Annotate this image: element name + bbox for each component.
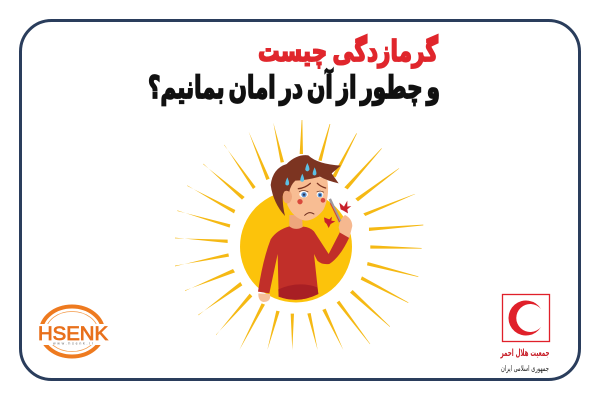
pain spikes	[324, 201, 351, 228]
logo url: www.hsenk.ir	[53, 342, 94, 346]
boy right hand	[339, 215, 352, 238]
boy sweater	[258, 226, 349, 300]
logo band	[36, 324, 109, 345]
sun rays	[175, 120, 423, 350]
logo ring	[41, 306, 103, 356]
boy mouth	[305, 213, 314, 215]
illustration: sick boy	[258, 155, 352, 302]
thermometer	[329, 198, 341, 223]
country name: جمهوری اسلامی ایران	[501, 364, 549, 373]
boy hair	[271, 155, 341, 216]
sweat drops	[285, 163, 316, 185]
logo: Red Crescent	[500, 294, 550, 373]
boy left hand	[258, 293, 270, 302]
crescent box	[502, 294, 550, 342]
logo: HSENK	[36, 306, 109, 356]
heading: how to stay safe: و چطور از آن در امان بمانیم؟	[148, 68, 440, 106]
boy head	[287, 175, 328, 221]
boy ear	[283, 190, 292, 203]
boy neck	[289, 215, 303, 230]
boy eyes	[298, 183, 326, 198]
title: what is heatstroke: گرمازدگی چیست	[258, 34, 438, 69]
boy sweater hem	[278, 284, 318, 300]
crescent	[508, 300, 541, 336]
sun disc	[240, 190, 352, 302]
organization name: جمعیت هلال احمر	[500, 348, 550, 359]
logo wordmark: HSENK	[38, 324, 108, 345]
boy cheeks	[297, 198, 325, 204]
